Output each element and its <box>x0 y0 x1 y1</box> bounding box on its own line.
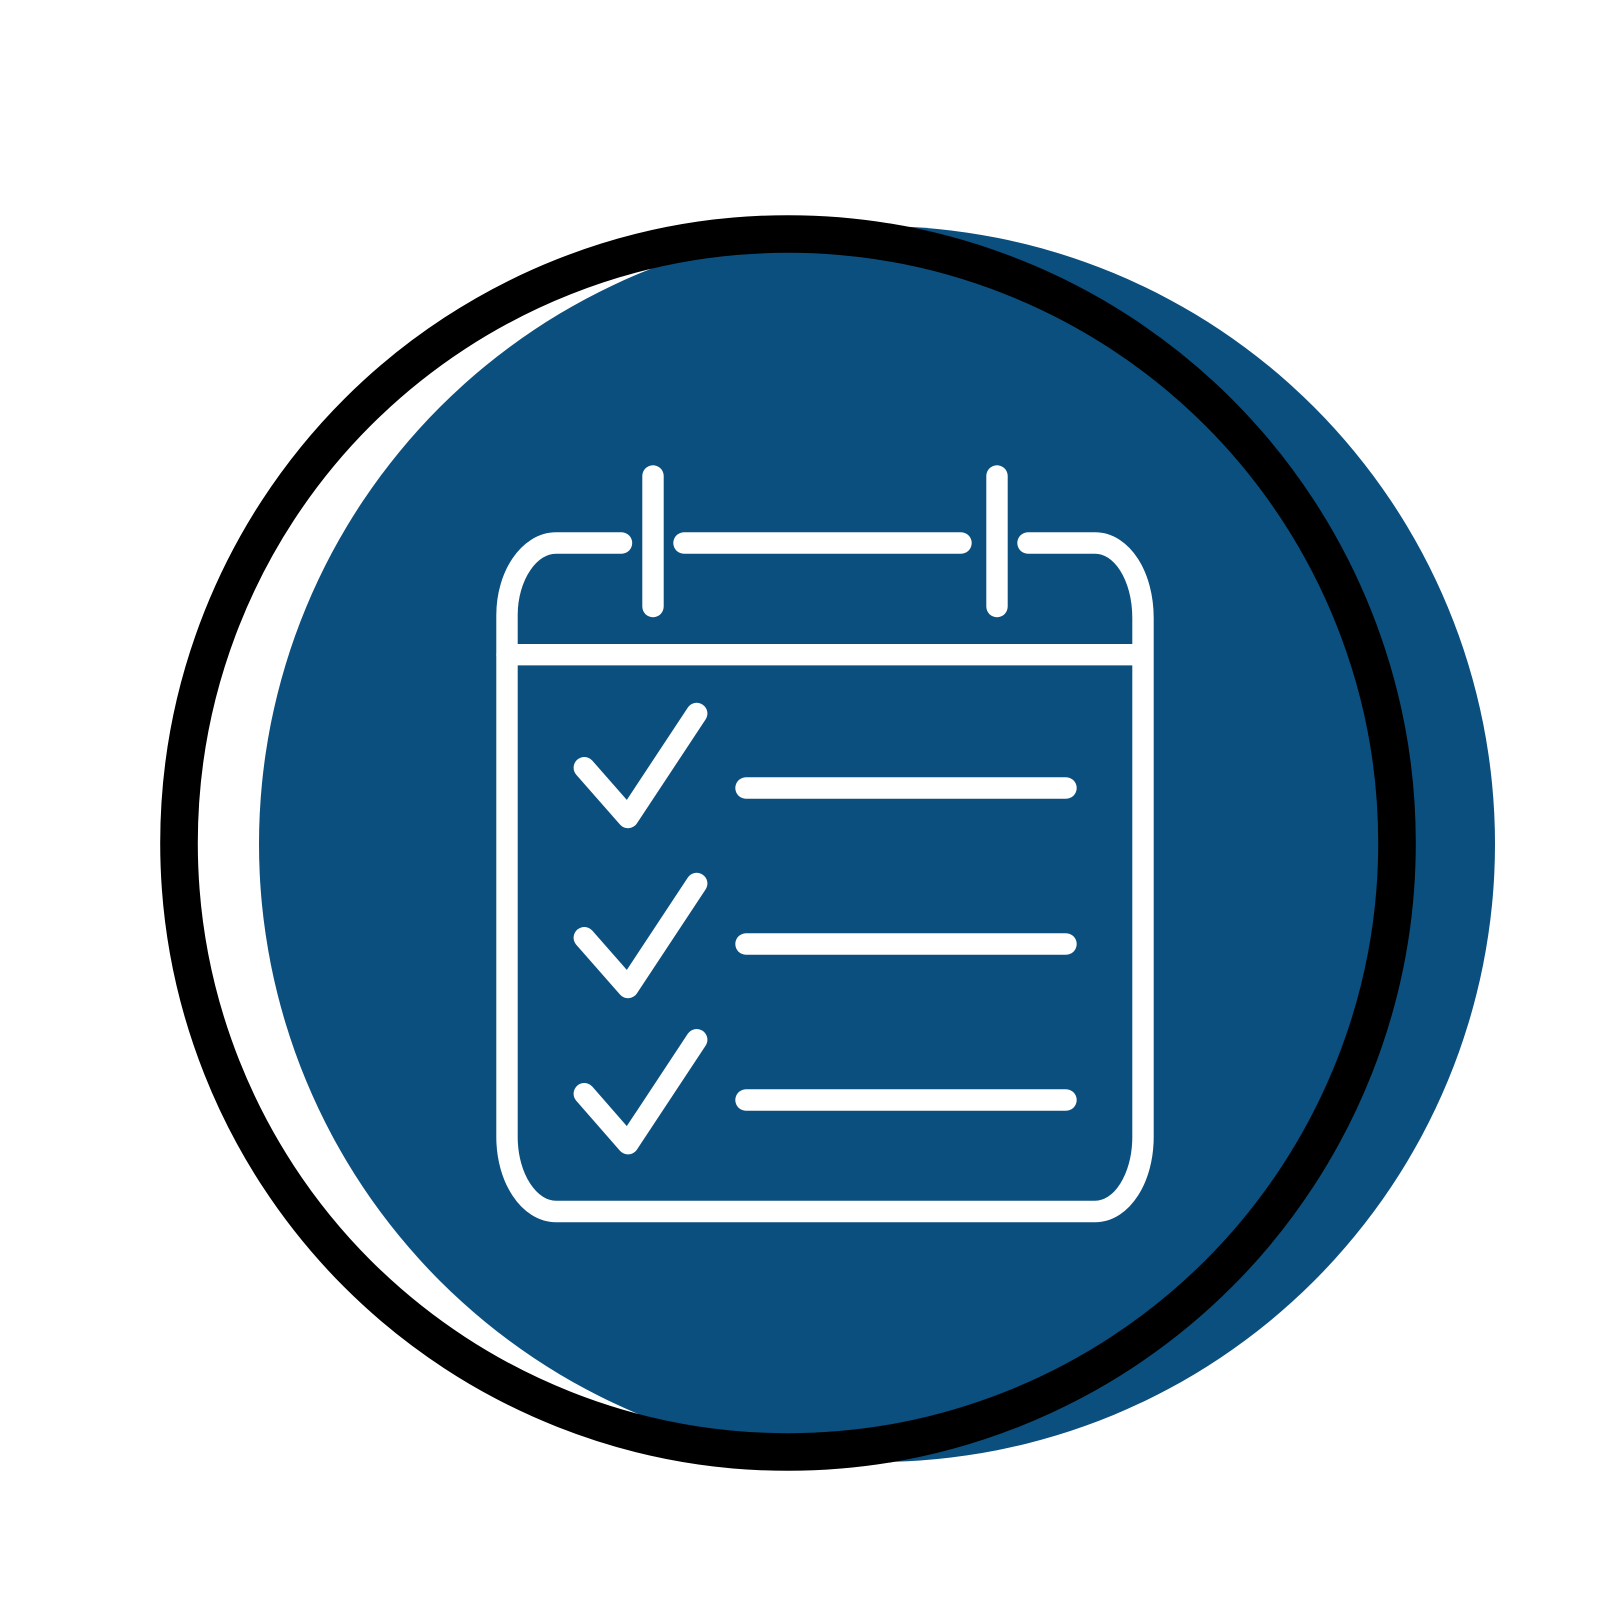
calendar top middle edge <box>684 532 961 554</box>
list line 3 <box>746 1089 1066 1111</box>
check mark 2 <box>584 884 697 988</box>
calendar top left edge <box>507 543 622 655</box>
calendar header divider <box>507 644 1143 665</box>
list line 1 <box>746 777 1066 799</box>
check mark 1 <box>584 714 697 818</box>
check mark 3 <box>584 1040 697 1144</box>
left binder ring <box>642 476 664 606</box>
right binder ring <box>986 476 1008 606</box>
black ring outline <box>179 234 1397 1452</box>
list line 2 <box>746 933 1066 955</box>
calendar body outline left and bottom <box>507 543 1143 1212</box>
icon: calendar checklist <box>507 476 1143 1212</box>
blue filled circle <box>259 226 1495 1462</box>
